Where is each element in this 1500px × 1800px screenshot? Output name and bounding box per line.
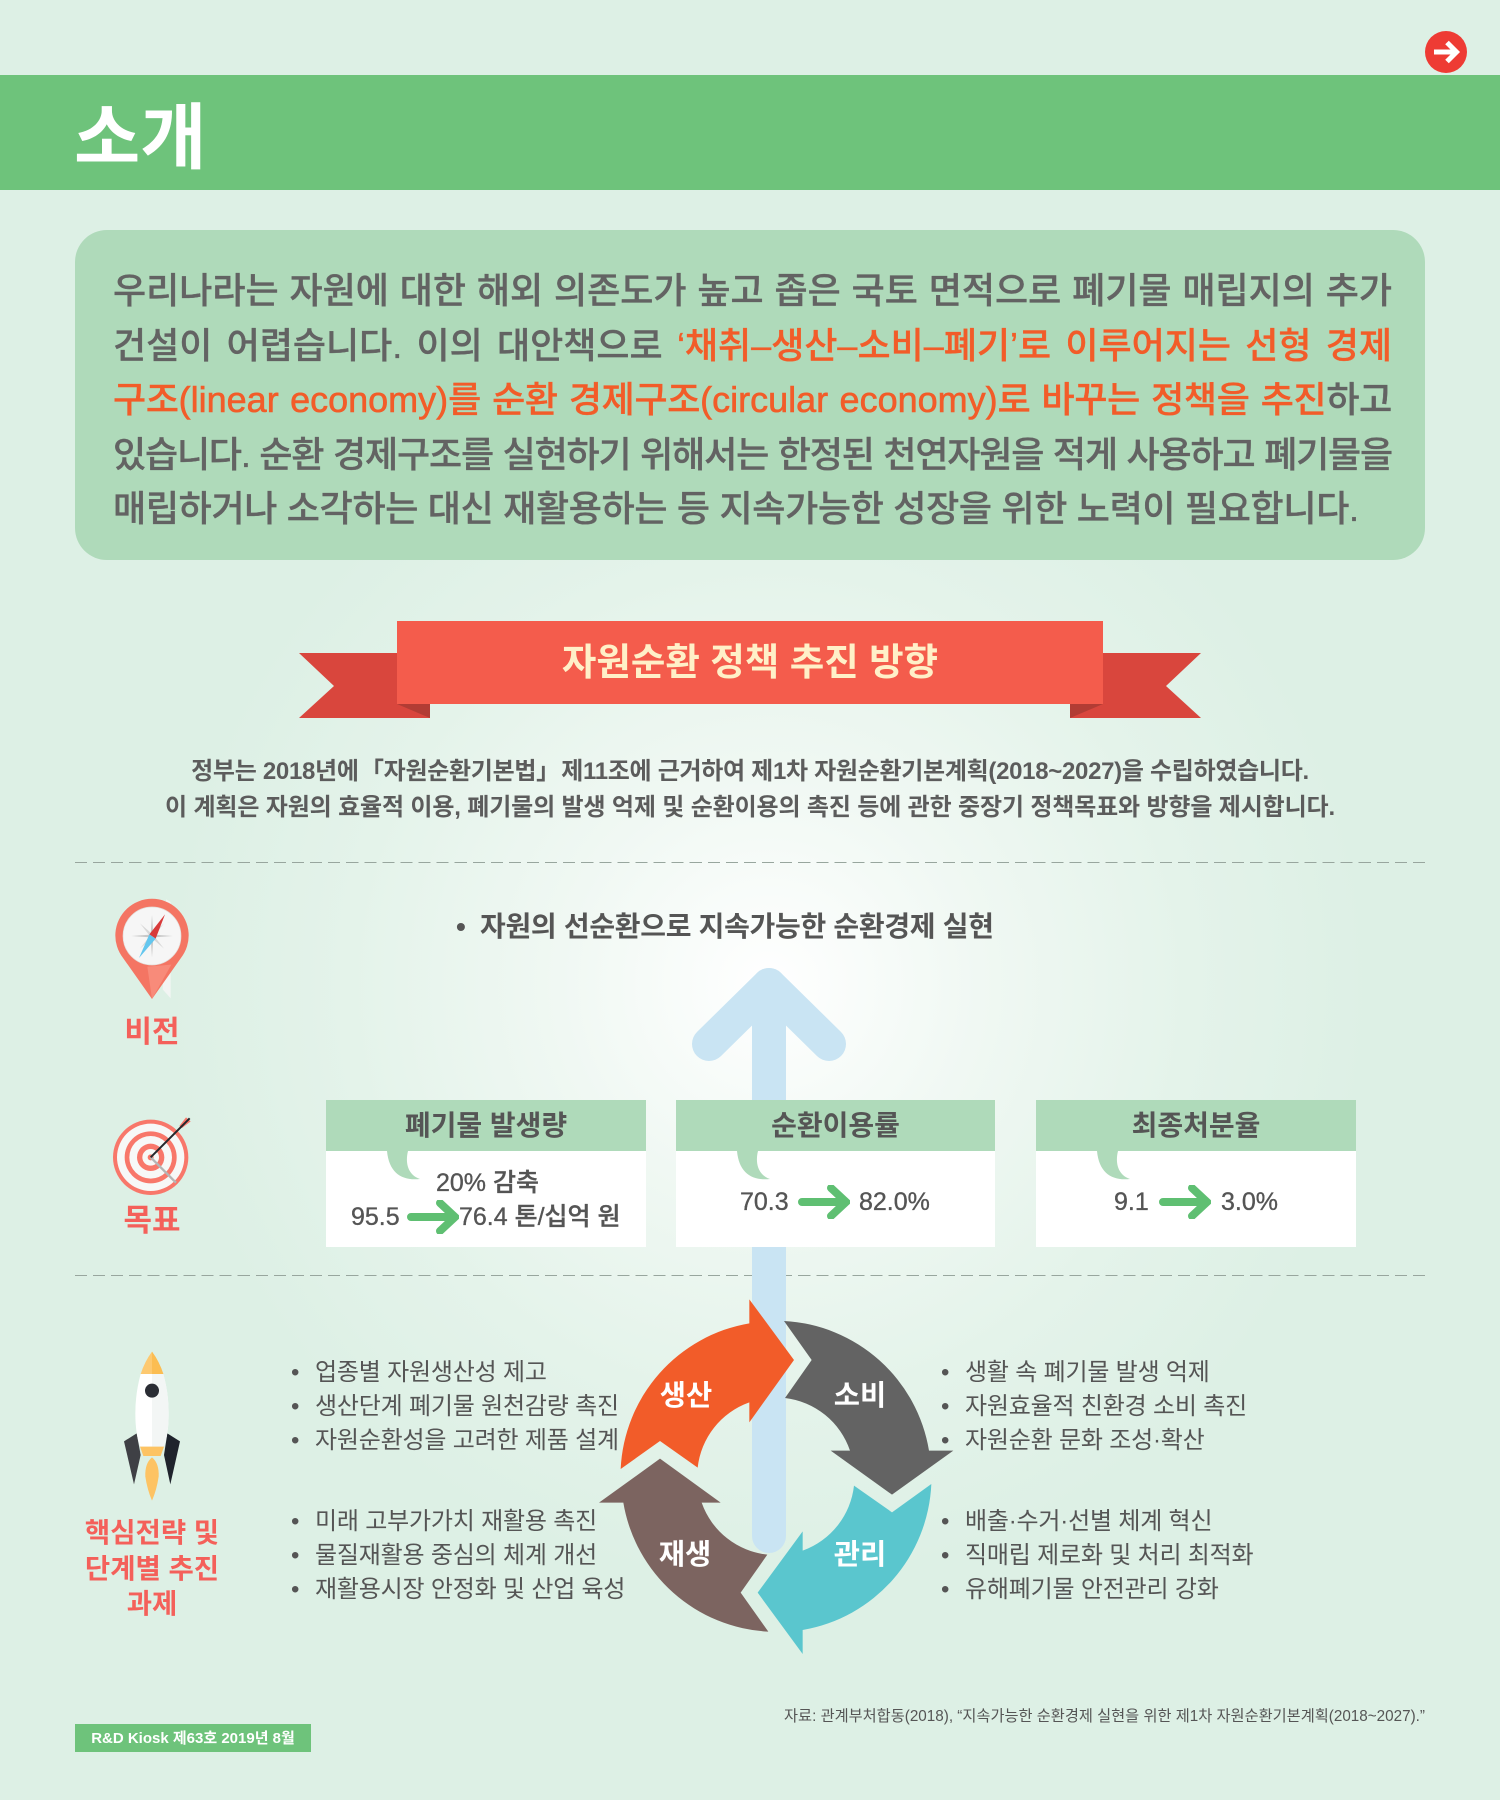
speech tail <box>737 1151 770 1180</box>
list: production tasks: 업종별 자원생산성 제고 <box>315 1359 547 1386</box>
start value: 95.5 <box>351 1203 400 1231</box>
list: consumption tasks: • <box>941 1427 949 1454</box>
list: consumption tasks: 생활 속 폐기물 발생 억제 <box>965 1359 1210 1386</box>
list: management tasks: • <box>941 1542 949 1569</box>
start value: 9.1 <box>1114 1188 1149 1216</box>
big upward arrow <box>692 968 846 1553</box>
intro text line 1: 우리나라는 자원에 대한 해외 의존도가 높고 좁은 국토 면적으로 폐기물 매립지의 추가 <box>113 270 1392 311</box>
arrow: consumption <box>784 1321 953 1495</box>
list: production tasks: • <box>291 1427 299 1454</box>
target value: 82.0% <box>859 1188 930 1216</box>
list: consumption tasks: 자원효율적 친환경 소비 촉진 <box>965 1393 1247 1420</box>
list: production tasks: 자원순환성을 고려한 제품 설계 <box>315 1427 619 1454</box>
vision statement: • <box>456 911 466 942</box>
arrow: management <box>758 1484 931 1654</box>
list: recycling tasks: 재활용시장 안정화 및 산업 육성 <box>315 1576 625 1603</box>
arrow: regeneration <box>599 1459 768 1632</box>
ribbon banner <box>299 621 1201 718</box>
list: management tasks: 유해폐기물 안전관리 강화 <box>965 1576 1219 1603</box>
panel: introduction text <box>75 230 1425 560</box>
list: production tasks: • <box>291 1393 299 1420</box>
list: management tasks: 직매립 제로화 및 처리 최적화 <box>965 1542 1253 1569</box>
reduction text: 20% 감축 <box>436 1169 539 1197</box>
arrow <box>407 1200 459 1234</box>
list: management tasks: • <box>941 1508 949 1535</box>
list: production tasks: • <box>291 1359 299 1386</box>
panel: waste generation card <box>326 1100 646 1247</box>
label: vision: 비전 <box>124 1016 180 1049</box>
list: production tasks: 생산단계 폐기물 원천감량 촉진 <box>315 1393 619 1420</box>
issue badge <box>75 1724 311 1752</box>
list: recycling tasks: • <box>291 1508 299 1535</box>
card heading <box>326 1100 646 1151</box>
label: core strategies: 핵심전략 및 <box>85 1517 219 1548</box>
cycle label: consumption: 소비 <box>834 1380 886 1412</box>
card heading: 폐기물 발생량 <box>405 1110 567 1141</box>
arrow <box>798 1185 850 1219</box>
cycle diagram <box>599 1300 954 1654</box>
label: core strategies: 단계별 추진 <box>85 1552 219 1584</box>
label: goals: 목표 <box>123 1203 181 1238</box>
list: consumption tasks: 자원순환 문화 조성·확산 <box>965 1427 1205 1454</box>
list: recycling tasks: 미래 고부가가치 재활용 촉진 <box>315 1508 597 1535</box>
target value: 76.4 톤/십억 원 <box>459 1203 620 1231</box>
intro text line 2: 건설이 어렵습니다. 이의 대안책으로 ‘채취–생산–소비–폐기’로 이루어지는 선형 경제 <box>113 325 1392 366</box>
header band with title <box>0 75 1500 190</box>
description text: 정부는 2018년에 「자원순환기본법」 제11조에 근거하여 제1차 자원순환기본계획(2018~2027)을 수립하였습니다. <box>191 758 1309 785</box>
target value: 3.0% <box>1221 1188 1278 1216</box>
label: core strategies: 과제 <box>127 1588 177 1619</box>
vision statement: 자원의 선순환으로 지속가능한 순환경제 실현 <box>480 911 994 942</box>
speech tail <box>387 1151 420 1180</box>
speech tail <box>1097 1151 1130 1180</box>
cycle label: management: 관리 <box>834 1539 886 1571</box>
icon: compass pin <box>115 898 189 999</box>
intro text line 5: 매립하거나 소각하는 대신 재활용하는 등 지속가능한 성장을 위한 노력이 필요합니다. <box>113 488 1359 529</box>
label: core strategies <box>85 1517 219 1619</box>
title: 소개 <box>74 99 206 179</box>
list: consumption tasks: • <box>941 1393 949 1420</box>
arrow <box>1159 1185 1211 1219</box>
card heading: 최종처분율 <box>1132 1110 1260 1141</box>
list: management tasks: • <box>941 1576 949 1603</box>
list: recycling tasks: 물질재활용 중심의 체계 개선 <box>315 1542 597 1569</box>
card heading: 순환이용률 <box>771 1110 900 1141</box>
card heading <box>676 1100 995 1151</box>
start value: 70.3 <box>740 1188 789 1216</box>
issue badge: R&D Kiosk 제63호 2019년 8월 <box>91 1730 295 1747</box>
panel: recycling rate card <box>676 1100 995 1247</box>
list: recycling tasks: • <box>291 1542 299 1569</box>
list: management tasks: 배출·수거·선별 체계 혁신 <box>965 1508 1212 1535</box>
arrow: production <box>621 1299 794 1469</box>
source note: 자료: 관계부처합동(2018), “지속가능한 순환경제 실현을 위한 제1차 자원순환기본계획(2018~2027).” <box>784 1708 1425 1725</box>
list: production tasks <box>291 1359 619 1454</box>
intro text line 4: 있습니다. 순환 경제구조를 실현하기 위해서는 한정된 천연자원을 적게 사용하고 폐기물을 <box>113 434 1392 475</box>
list: management tasks <box>941 1508 1253 1603</box>
list: recycling tasks <box>291 1508 625 1603</box>
cycle label: production: 생산 <box>660 1380 712 1412</box>
ribbon title: 자원순환 정책 추진 방향 <box>562 641 938 683</box>
icon: red next arrow button <box>1425 31 1467 73</box>
icon: rocket <box>124 1352 180 1500</box>
intro text line 3: 구조(linear economy)를 순환 경제구조(circular economy)로 바꾸는 정책을 추진하고 <box>113 379 1392 420</box>
icon: target <box>113 1118 191 1195</box>
description text <box>165 758 1335 821</box>
list: consumption tasks: • <box>941 1359 949 1386</box>
list: recycling tasks: • <box>291 1576 299 1603</box>
panel: final disposal rate card <box>1036 1100 1356 1247</box>
cycle label: regeneration: 재생 <box>659 1539 711 1571</box>
card heading <box>1036 1100 1356 1151</box>
description text: 이 계획은 자원의 효율적 이용, 폐기물의 발생 억제 및 순환이용의 촉진 등에 관한 중장기 정책목표와 방향을 제시합니다. <box>165 794 1335 821</box>
list: consumption tasks <box>941 1359 1247 1454</box>
